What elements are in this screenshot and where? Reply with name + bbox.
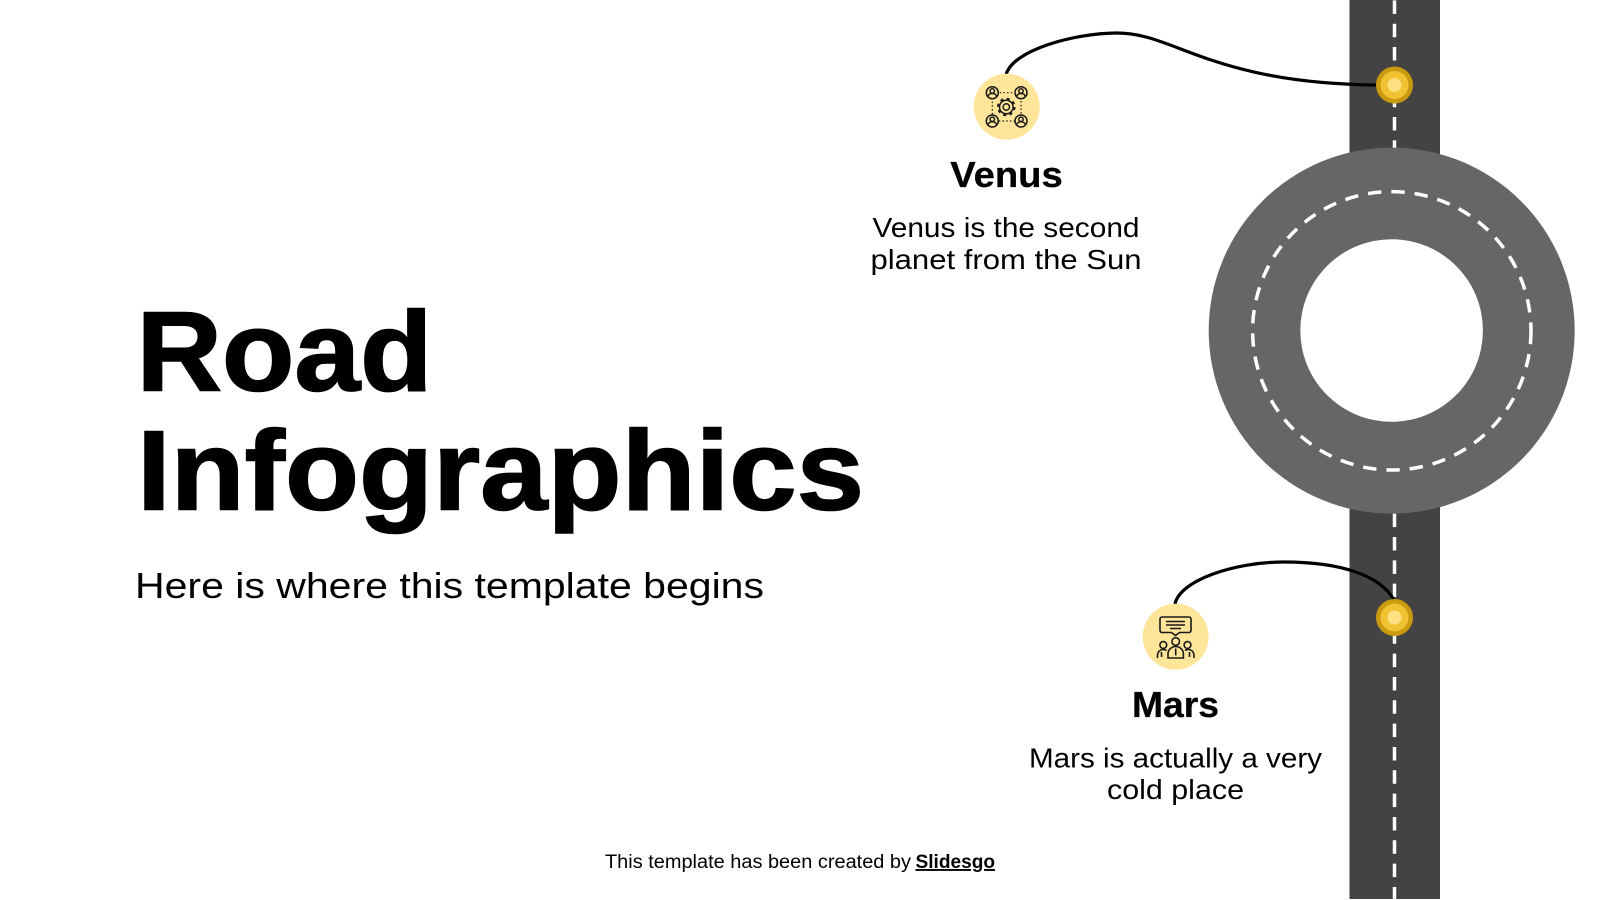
title: Infographics bbox=[137, 408, 864, 534]
icon: Venus team gear bbox=[974, 74, 1040, 140]
road: roundabout bbox=[1209, 148, 1575, 514]
connector: Venus bbox=[1006, 33, 1376, 85]
heading: Mars: Mars bbox=[1132, 684, 1219, 725]
subtitle: Here is where this template begins bbox=[135, 565, 764, 606]
text: Mars description: cold place bbox=[1107, 774, 1244, 805]
title: Road bbox=[136, 288, 433, 414]
road: vertical bbox=[1350, 0, 1440, 899]
title bbox=[136, 288, 864, 534]
text: Mars description: Mars is actually a very bbox=[1029, 742, 1322, 774]
icon: Mars team speech bbox=[1143, 604, 1209, 670]
road marker: Venus bbox=[1376, 66, 1413, 104]
text: Venus description: Venus is the second bbox=[872, 212, 1140, 243]
road marker: Mars bbox=[1376, 599, 1413, 636]
text: Venus description bbox=[870, 212, 1142, 275]
heading: Venus: Venus bbox=[950, 154, 1063, 195]
footer credit: Slidesgo bbox=[916, 852, 995, 873]
text: Venus description: planet from the Sun bbox=[870, 244, 1142, 275]
text: Mars description bbox=[1029, 742, 1322, 805]
footer credit: This template has been created by bbox=[605, 852, 912, 873]
connector: Mars bbox=[1175, 562, 1394, 604]
